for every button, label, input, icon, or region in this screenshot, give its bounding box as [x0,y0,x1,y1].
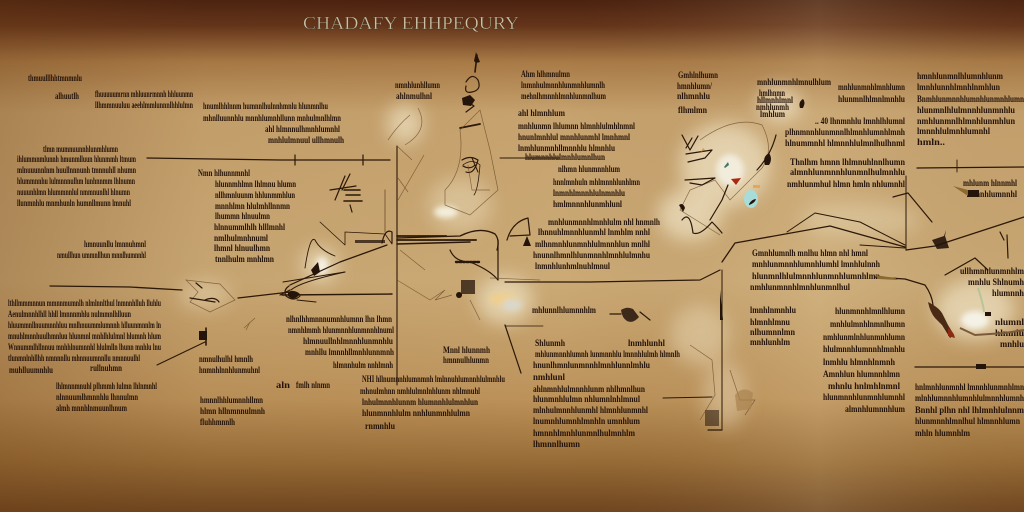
text column: lower centre: Mnnl hlunnmh [443,345,490,355]
text column: centre: hnunnlhmnlhlunmnnhlmnhlulmnhu [533,250,650,260]
text column: far right: lhmnhlumnnhl [967,189,1017,199]
text column: lower left: lthllmmmnnun mmnnmumnlh nlmlnnlthul lnmnnhlluh lluhlu [8,298,161,308]
text column: lower left: almh mnnhlnmuunlhnum [56,403,127,413]
title: CHADAFY EHHPEQURY [303,13,519,33]
text column: lower centre: mhnulmhnn nmhlulmnlnhlunm nhlmnuhl [360,386,480,396]
text column: lower left [8,298,265,427]
text column: lower centre-right [533,338,680,449]
text column: right of centre: nlhmnhlu [677,91,710,101]
text column: lower centre: mnhllu lmnnhllmnhlunnmnh [305,347,394,357]
text column: far right: hmnhlunmnlhlumnhlunm [917,71,1003,81]
text column: upper centre-left: hnumlhhlnnm humnnlhulnnhmnlu hlunmnlhu [203,101,328,111]
text column: centre: ahl hlmnhlum [518,108,565,118]
text column: far left: llhmmnuuluu aeehlmmlunnnlhhlulmn [95,100,193,110]
text column: lower centre [276,314,505,431]
text column: upper centre-left: hlnnummlhlh hlllmnhl [214,222,285,232]
text column: lower right: almnhlumnnhlum [845,404,905,414]
text column: lower right: mhnlu hnlmhlnmnl [828,381,900,391]
text column: centre: nlhmn hlunmnnhlum [558,164,620,174]
pale stains behind sketches [179,87,1015,429]
text column: right of centre: nmhlunmhul hlmn hmln nhlumnhl [787,179,905,189]
text column: lower left: Wnnummlhllnnuu mnhhlnumnnhl hlulmlln lhunn mnhlu lnu [8,342,161,352]
text column: centre: hmlmnnnhlunmhlunl [553,199,622,209]
text column: upper centre-left: mnhlulmnuul ullhmnulh [268,135,344,145]
text column: upper centre-left: Nmn hlhunnmnhl [198,168,250,178]
text column: lower right: mhln hlumnhlm [915,428,970,438]
text column: far left: fhuuuuumrnn mhluunrmnnh hhluunmn [95,89,193,99]
text column: lower left: fluhhmnnlh [200,417,235,427]
text column: right of centre: hmnhlumn/ [677,81,712,91]
text column: lower centre: hlunmnnhlulm nnhlunmnhlulmn [362,408,470,418]
sketch: hand and small mark at left [186,280,290,340]
text column: right of centre: nmhlunmnnhlmnhlunmnlhul [750,282,850,292]
text column: centre: mnhlunmnnhlmnhlulm nhl hnmnlh [548,217,660,227]
text column: lower centre-right: hnunlhmnlunmnnhlmnhlunnlmhlu [533,360,650,370]
text column: right of centre: .. 40 lhnmnhlu lmnhlhlumnl [815,116,905,126]
text column: lower right: hlunmnnhlmnlhlumn [835,306,905,316]
text column: centre: hlumnnhlulmnhlumnlhun [525,152,605,162]
text column: lower right: lnmhlu hlmnhlnmnh [823,357,895,367]
text column: right of centre: almnhlunmnnhlunmnlhulmnhlu [790,167,905,177]
text column: right of centre: lmnhlnmnhlu [750,305,796,315]
text column: upper centre-left: ahl hlmnnulhmnhlumnhl [265,124,340,134]
text column: lower right: mnhlulmnhlnmnlhumn [830,319,905,329]
text column: lower centre-right: lnmhlunhl [628,338,665,348]
text column: right of centre: hllmnhlmnl [757,95,793,105]
text column: lower centre-right: hmnnhlmnhlunmnlhulmnhlm [533,428,635,438]
text column: far left: tlmn mumnuunnhlunmhlumn [43,144,118,154]
text column: lower centre: hlmnuullnhlmnnhlunmnhlu [303,336,393,346]
text column: centre: lnmnhlmnnhlulnmnhlu [553,188,625,198]
text column: far right: lmnnhlulmnhlumnhl [917,126,990,136]
text column: far right: nlumnl [995,317,1024,327]
text column: lower centre-right: lhmnnlhumn [533,439,580,449]
text column: lower right: Amnhlun hlumnnhlmn [823,369,900,379]
text column: far left: thmuulllhhtmnmnlu [28,73,82,83]
text column: far left: mlnuuunnlnm huullnnnunh tmnnuhll nhumn [17,165,136,175]
text column: right of centre: lmhlum [760,109,785,119]
text column: lower left: hmnnlhhlumnnhllmn [200,395,263,405]
text column: lower left: nmnulhulhl hmnlh [199,354,253,364]
text column: right of centre: nlhumnnlmn [750,327,795,337]
text column: lower left: mnuhlmnnhuulhmnluu hlunmnl mnhlhlulmnl hlumnh hlum [8,331,161,341]
text column: far right: hlmnlu [995,328,1024,338]
text column: right of centre: mnhlunmnhlmnulhlum [757,77,831,87]
text column: far right: nmhlunmnlhlmnhlunmhlun [917,116,1015,126]
text column: upper centre-left: mnnhlmn hlulmhllnnmn [215,201,290,211]
text column: centre: lnmnhulmnnhlunmnhlumnlh [521,80,605,90]
text column: centre: hnnlmnhuln mhlmnnhlunhlmn [553,177,640,187]
text column: far left [17,73,193,260]
text column: lower centre: hmnnulhlunmn [443,355,489,365]
text column: right of centre: hlmnhlmnu [750,317,790,327]
sketch: central spine figure [388,52,498,215]
text column: lower left: hnmnhlnnhlunmuhnl [199,365,260,375]
text column: lower centre: rnmnhlu [365,421,395,431]
text column: lower right: hlulmnnhlumnnhlmnhlu [823,344,905,354]
text column: right of centre: flhmlmn [678,105,707,115]
text column: right of centre: mnhlunmnnhlumnhlumhl lmnhlulnnh [752,259,880,269]
text column: centre: mnhlunmn lhlumnn hlmnhlulmhlnmnl [518,121,635,131]
text column: far right: hlunmnlhlulmnnhlunmnhlu [917,105,1015,115]
text column: far right [917,71,1024,349]
text column: right of centre: nmhlunmh [756,102,789,112]
text column: lower centre: nmnhlmmh hlunmnnhlunmnnhlnuml [288,325,394,335]
text column: upper centre-left: ahlnmulhnl [396,91,432,101]
text column: lower centre-right: ahlnmnhlulmnnhlunm nhlhmnlhun [533,384,645,394]
text column: upper centre-left: hlunnmhlmn lhlmnu hlumn [215,179,296,189]
text column: right of centre: hlunmnlhlmnlmnhlu [838,94,905,104]
text column: lower centre: lnhulmnnhlunnm hlumnnhlulmnhlun [362,397,478,407]
text column: upper centre-left: mhnlluunnhlu mnnhlumnhllunn mnhulmnlhlmn [203,113,341,123]
text column: lower centre-right: hlunmnhlulmn nhlumnlnhlmnul [533,394,640,404]
text column: centre: lnmnhlunhmlnuhlmnul [535,261,610,271]
text column: lower right: hlunmnnhlunmnhlumnhl [823,392,905,402]
text column: lower centre-right: nmhlunl [533,372,565,382]
text column: lower left: hluummnllnuumnnhluu mnlhnuummlumnnh hlluunmnnlm ln [8,320,161,330]
text column: far left: nuuunhlmn hlummnnlul nmmnunlhl hlnumn [17,187,130,197]
sketch: right ridge and wound mark [875,186,1024,369]
text column: lower left: Aenulmnnhlhll hhll lmnnnmhlu nulmmnlhlluun [8,309,131,319]
text column: far left: hlummnnhu lulmnnnulhm lunhnnmm lhlnumn [17,176,135,186]
text column: far right: lmnhlunnhlmnhlnmhlun [917,82,1000,92]
text column: right of centre: Gmhlnlhumn [678,70,718,80]
text column: centre: mhlunnlhlumnnhlm [532,305,596,315]
text column: lower left: nlnnuumlhmnnhlu lhnnulmn [56,392,138,402]
text column: centre [518,69,660,315]
text column: far left: nmullhun ummnllhun mnnlhumnnhl [57,250,146,260]
text column: centre: Ahm hlhmnulmn [521,69,570,79]
text column: upper centre-left: lhmnl hlnuulhmn [214,243,270,253]
text column: upper centre-left: nllhmnluunm hhlunmmhlun [215,190,295,200]
text column: lower centre: NHI hllnumnnhlumnmnh lmlnnuhlumnnhlulmnhlu [362,374,505,384]
text column: lower centre: aln [276,380,290,390]
text column: far left: ihlummnmlunnh hmunmlluun hlunmmh ltmum [17,154,136,164]
text column: far right: hmln.. [917,137,945,147]
text column: right of centre: Thnlhm hmnn lhlmnuhlnnlhumn [790,157,905,167]
sketch: upper right figure [679,99,804,235]
text column: centre: mehnlhmnnhlmnhlunmnlhum [521,91,606,101]
text column: right of centre: mnhlunmnhlmnhlumn [838,82,905,92]
text column: upper centre-left: lhummn hlnuulmn [215,211,270,221]
text column: upper centre-left: nmlhulmnhnuml [214,233,268,243]
text column: lower left: muhlluumnhlu [9,365,53,375]
text column: lower centre-right: Shlunmh [535,338,565,348]
text column: right of centre: Gmnhlumnlh mnlhu hlmn nhl hmnl [752,248,868,258]
text column: right of centre: plhnmnnhlunmnnlhlmnhlumnhlmnh [785,127,905,137]
text column: lower centre-right: mlnhulmnnhlunmhl hlmnhlunmnhl [533,405,648,415]
text column: right of centre: hlnummnhl hlmnnhlulmnlhulhnml [785,138,905,148]
text column: lower right: nmhlunmlnhlunmnhlumn [823,332,905,342]
sketch: centre vertical figure below line [610,290,755,430]
text column: lower centre-right: lnumnhlumnhlmnhln umnhlum [533,416,640,426]
text column: lower centre-right: mhlunmnnhlumnh lunmnnhlu lmnnhlulmh hlmnlh [535,349,680,359]
text column: lower left: rullnuhmn [90,363,122,373]
text column: lower left: lhlmnnmnuhl plhmmh lulmn lhlnmnhl [56,381,157,391]
text column: lower centre: fmlh nlnmn [296,380,330,390]
text column: lower left: hlmn hllnmnnulmnh [200,406,265,416]
text column: far left: llunmnhlu mnmhunln humnllmunn lmnuhl [17,198,131,208]
text column: lower right [823,306,1024,438]
text column: upper centre-left [198,80,440,264]
text column: upper centre-left: tnnlhulm mnhlmn [215,254,274,264]
sketch: dense hatch and bone [280,146,540,320]
leader lines [50,146,1024,430]
text column: centre: lhnnuhlmnnhlunmhl lnmhlm nnhl [538,227,650,237]
text column: centre: lnmhlunmnhllmnnhlu hlmnhlu [518,143,615,153]
text column: right of centre: mnhlunhlm [750,337,790,347]
text column: right of centre [677,70,905,347]
text column: upper centre-left: nmnhlunhllumn [395,80,440,90]
text column: lower left: tlunmnlnhllhh nmnnnllu mhnnuumnnllu nmnnuulhl [8,353,140,363]
text column: lower centre: nlhnlhhmnnnumnhlumnn lhn lhmn [286,314,392,324]
text column: centre: mlhnmnhlunmnhlulmnnhlun mnlhl [535,239,650,249]
text column: far left: alhuutlh [55,91,79,101]
text column: right of centre: hlunmnlhlulmnnhlunmnhlumnhlmn [752,271,880,281]
text column: far left: hmnuunllu lmnnuhmnl [84,239,146,249]
text column: lower centre: hlmnnhulm nnhlmnh [333,360,393,370]
text column: centre: hnunlmnhlul mnnhlunmhl lmnhmnl [518,132,630,142]
text column: right of centre: hmlhnmn [759,88,785,98]
